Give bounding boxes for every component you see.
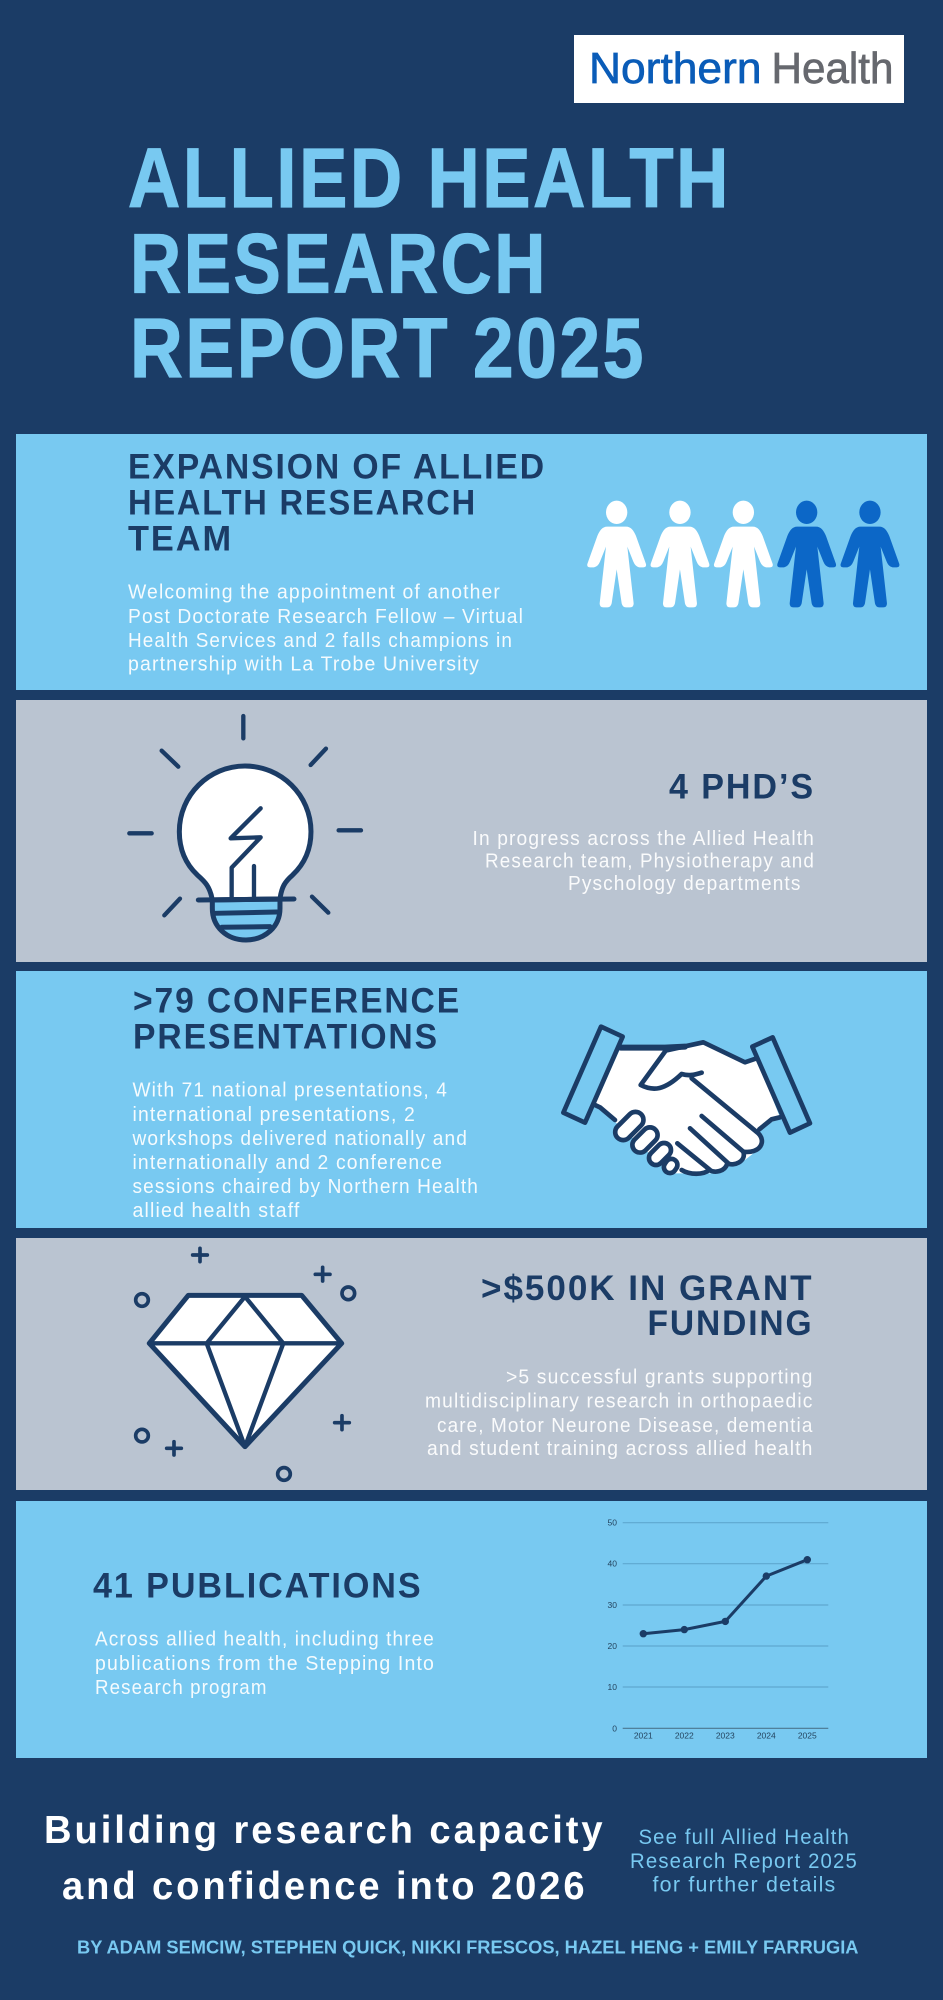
line chart: publications per year: 10 xyxy=(608,1682,617,1692)
text: PhD description: Pyschology departments xyxy=(568,872,802,895)
heading: expansion xyxy=(128,446,546,558)
heading: expansion: EXPANSION OF ALLIED xyxy=(128,446,546,486)
text: conference description: internationally and 2 conference xyxy=(132,1151,443,1174)
text: publications description: Across allied health, including three xyxy=(95,1628,435,1651)
logo: Northern Health: Health xyxy=(772,44,894,93)
text: grant description: and student training across allied health xyxy=(427,1437,814,1460)
line chart: publications per year xyxy=(608,1518,828,1740)
line chart: publications per year: 2024 xyxy=(757,1730,776,1740)
title: REPORT 2025 xyxy=(130,301,646,395)
icon: diamond with sparkles xyxy=(136,1248,355,1480)
heading: grant funding: FUNDING xyxy=(648,1303,814,1343)
closing statement: and confidence into 2026 xyxy=(62,1865,588,1908)
title: RESEARCH xyxy=(130,216,548,310)
line chart: publications per year: 20 xyxy=(608,1641,617,1651)
heading: grant funding xyxy=(481,1268,814,1343)
heading: expansion: HEALTH RESEARCH xyxy=(128,482,477,522)
text: grant description: >5 successful grants supporting xyxy=(506,1366,814,1389)
panel: publications xyxy=(16,1501,927,1758)
logo: Northern Health: Northern xyxy=(589,44,762,93)
line chart: publications per year: 50 xyxy=(608,1518,617,1528)
see full report note: for further details xyxy=(652,1874,836,1897)
text: grant description xyxy=(425,1366,814,1460)
authors byline: BY ADAM SEMCIW, STEPHEN QUICK, NIKKI FRESCOS, HAZEL HENG + EMILY FARRUGIA xyxy=(77,1936,858,1957)
heading: 4 PhDs: 4 PHD’S xyxy=(669,766,815,806)
text: conference description: With 71 national presentations, 4 xyxy=(132,1079,448,1102)
heading: conference presentations xyxy=(133,981,461,1056)
heading: conference presentations: >79 CONFERENCE xyxy=(133,981,461,1021)
icon: five people xyxy=(587,501,899,607)
text: PhD description: Research team, Physiotherapy and xyxy=(485,850,815,872)
heading: conference presentations: PRESENTATIONS xyxy=(133,1016,439,1056)
heading: expansion: TEAM xyxy=(128,518,233,558)
text: expansion description: partnership with La Trobe University xyxy=(128,653,480,676)
text: conference description xyxy=(132,1079,479,1222)
text: grant description: care, Motor Neurone Disease, dementia xyxy=(437,1414,814,1437)
icon: handshake xyxy=(563,1027,810,1175)
closing statement: Building research capacity xyxy=(44,1809,606,1852)
panel: conference presentations xyxy=(16,971,927,1228)
see full report note: Research Report 2025 xyxy=(630,1850,858,1873)
text: publications description: publications from the Stepping Into xyxy=(95,1652,435,1675)
line chart: publications per year: 2025 xyxy=(798,1730,817,1740)
text: conference description: allied health staff xyxy=(132,1199,300,1222)
text: publications description: Research program xyxy=(95,1676,268,1699)
heading: grant funding: >$500K IN GRANT xyxy=(481,1268,814,1308)
logo: Northern Health xyxy=(574,35,904,103)
line chart: publications per year: 2022 xyxy=(675,1730,694,1740)
title: ALLIED HEALTH xyxy=(128,131,731,225)
text: expansion description xyxy=(128,580,524,676)
text: expansion description: Post Doctorate Research Fellow – Virtual xyxy=(128,605,524,628)
line chart: publications per year: 2023 xyxy=(716,1730,735,1740)
see full report note: See full Allied Health xyxy=(638,1826,850,1849)
line chart: publications per year: 40 xyxy=(608,1559,617,1569)
title xyxy=(128,131,731,395)
text: publications description xyxy=(95,1628,435,1699)
line chart: publications per year: 0 xyxy=(612,1723,617,1733)
text: expansion description: Health Services and 2 falls champions in xyxy=(128,629,513,652)
text: conference description: sessions chaired by Northern Health xyxy=(132,1175,479,1198)
panel: grant funding xyxy=(16,1238,927,1490)
line chart: publications per year: 30 xyxy=(608,1600,617,1610)
text: PhD description: In progress across the Allied Health xyxy=(472,827,815,850)
closing statement xyxy=(44,1809,606,1908)
text: grant description: multidisciplinary research in orthopaedic xyxy=(425,1390,814,1413)
icon: light bulb xyxy=(129,716,361,940)
panel: 4 PhDs xyxy=(16,700,927,962)
line chart: publications per year: 2021 xyxy=(634,1730,653,1740)
panel: expansion of allied health research team xyxy=(16,434,927,690)
text: conference description: workshops delivered nationally and xyxy=(132,1127,468,1150)
text: PhD description xyxy=(472,827,815,895)
text: conference description: international presentations, 2 xyxy=(132,1103,416,1126)
text: expansion description: Welcoming the appointment of another xyxy=(128,580,501,604)
heading: 41 publications: 41 PUBLICATIONS xyxy=(93,1566,422,1606)
see full report note xyxy=(630,1826,858,1897)
